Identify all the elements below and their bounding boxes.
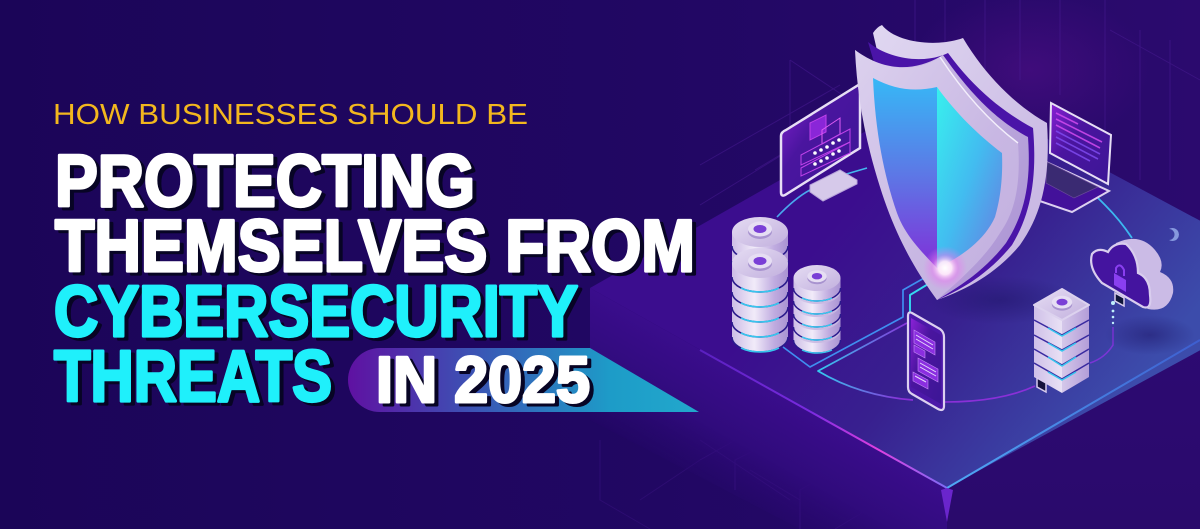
cloud face [1091,244,1150,308]
heading line: threats: THREATS [54,337,332,417]
monitor screen [781,84,860,196]
light flare at shield tip [923,246,967,290]
icon: rack server [1034,289,1089,393]
platform right side [947,340,1200,529]
front stack [732,248,788,352]
platform lit edges [700,340,1200,488]
floor shadow of cloud [1105,315,1195,355]
heading line: protecting: PROTECTING [55,141,475,222]
server top plate [1034,289,1089,320]
badge ribbon [348,348,699,412]
background circuit lines [600,0,1200,529]
server layer lines [1034,320,1089,380]
icon: desktop monitor [781,84,860,201]
phone chat bubbles [913,330,938,389]
server port [1037,378,1046,392]
lock icon [1114,265,1126,292]
laptop base [1028,160,1109,212]
platform top surface [590,85,1200,488]
badge text: in 2025: IN 2025 [376,343,590,416]
shield [855,25,1048,300]
shield back layer [873,25,1048,300]
cloud plug [1115,293,1124,306]
heading line: cybersecurity: CYBERSECURITY [54,272,578,352]
platform [590,85,1200,529]
shield front face [855,50,1019,300]
phone text lines [915,335,936,382]
platform left side [590,288,947,529]
shield rim highlight [940,57,1018,143]
icon: large database stack [732,217,788,352]
small crescent marker [1169,228,1179,241]
phone screen glow [911,318,941,404]
laptop code lines [1056,113,1102,161]
back stack [732,217,788,276]
shield purple stripe [868,42,1034,300]
laptop keyboard [1046,162,1098,198]
icon: cloud with lock [1091,239,1173,324]
icon: laptop [1028,103,1111,212]
plug light dots [1111,301,1115,324]
shield middle layer [855,50,1029,300]
monitor stand [810,170,857,201]
server hub [1052,296,1072,311]
shield blue left panel [873,78,937,268]
phone body [908,312,944,410]
kicker: how businesses should be: HOW BUSINESSES SHOULD BE [53,99,528,131]
monitor password dots [813,138,841,166]
monitor login fields [801,115,850,176]
heading line: themselves from: THEMSELVES FROM [55,206,695,287]
title block [53,99,695,417]
icon: smartphone [908,312,944,410]
shield blue right panel [937,87,1002,268]
platform corner spike [941,488,953,522]
laptop screen [1050,103,1111,184]
server body right [1062,305,1089,393]
server body left [1034,305,1062,393]
icon: small database stack [794,265,840,353]
circuit wires [777,168,1132,402]
floor shadow of shield [925,276,1075,324]
background glow [910,0,1150,150]
cloud extrusion [1110,239,1173,310]
